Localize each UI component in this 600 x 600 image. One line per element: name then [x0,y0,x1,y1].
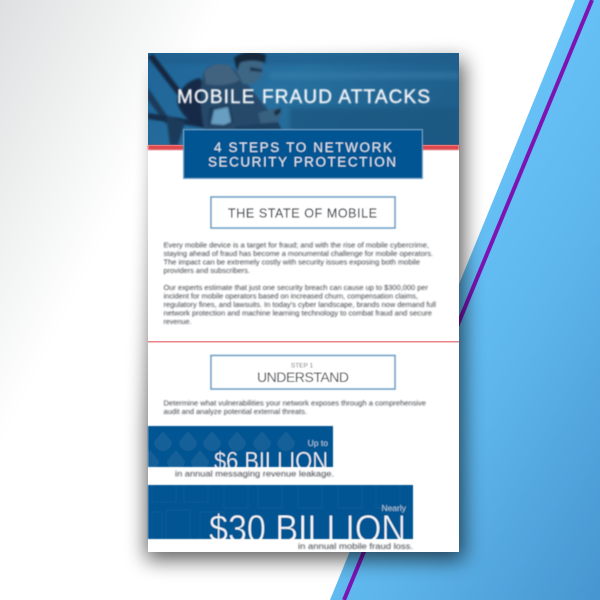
caption: messaging leakage: in annual messaging revenue leakage. [175,470,334,478]
blue diagonal panel [330,0,600,600]
text block: step 1 description: audit and analyze potential external threats. [164,409,307,416]
text block: step 1 description: Determine what vulnerabilities your network exposes through a comprehensive [164,400,426,408]
text block: intro paragraph 1: staying ahead of fraud has become a monumental challenge for mobile operators. [164,251,433,258]
panel: infographic card [141,52,459,552]
stat banner: 30 billion: Nearly [381,503,407,513]
stat banner: 6 billion: Up to [308,438,328,448]
text block: intro paragraph 2: incident for mobile operators based on increased churn, compensation claims, [164,294,418,300]
text block: intro paragraph 2 [164,285,436,326]
red header stripe [148,145,459,150]
text block: intro paragraph 2: revenue. [164,319,192,326]
text block: intro paragraph 2: regulatory fines, and lawsuits. In today's cyber landscape, brands now demand full [164,302,436,309]
subtitle box [184,130,422,178]
stat banner: 30 billion [147,484,414,540]
subtitle box: SECURITY PROTECTION [208,154,396,170]
text block: intro paragraph 1: The impact can be extremely costly with security issues exposing both mobile [164,260,420,266]
purple diagonal line [344,0,592,600]
photo: man with phone [148,52,282,145]
text block: intro paragraph 2: Our experts estimate that just one security breach can cause up to $300,000 per [164,285,429,292]
subtitle box: 4 STEPS TO NETWORK [214,140,392,155]
stat banner: 30 billion: $30 BILLION [209,508,406,550]
card shadow [146,60,464,560]
text block: intro paragraph 1: providers and subscribers. [164,268,250,275]
heading box: step 1 understand [211,356,395,389]
title: MOBILE FRAUD ATTACKS [177,87,430,108]
stat banner: 6 billion: $6 BILLION [214,448,328,476]
heading box: the state of mobile [211,197,395,228]
text block: intro paragraph 1: Every mobile device is a target for fraud; and with the rise of mobile cybercrime, [164,242,429,250]
stat banner: 6 billion [147,425,334,468]
heading box: step 1 understand: UNDERSTAND [257,369,349,385]
caption: fraud loss: in annual mobile fraud loss. [298,542,413,551]
header banner [148,52,459,145]
text block: step 1 description [164,400,426,416]
pattern: drops [148,431,295,468]
heading box: the state of mobile: THE STATE OF MOBILE [228,206,377,220]
text block: intro paragraph 2: network protection and machine learning technology to combat fraud and secure [164,310,432,318]
pattern: phones [152,485,400,539]
heading box: step 1 understand: STEP 1 [291,362,314,370]
red divider [148,341,459,342]
text block: intro paragraph 1 [164,242,433,275]
